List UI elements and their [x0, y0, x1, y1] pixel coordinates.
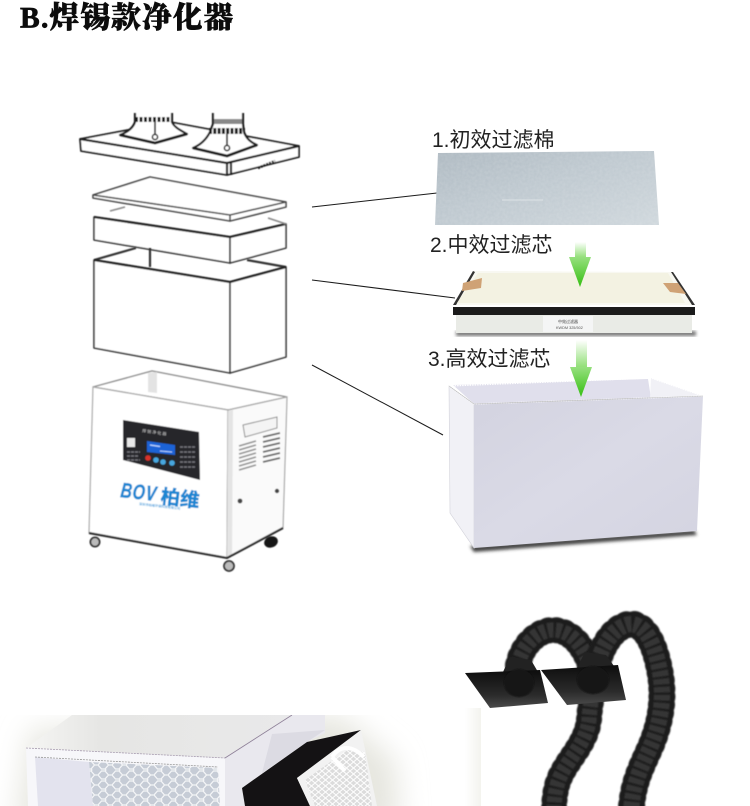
green arrow 2 [570, 340, 592, 397]
medium filter outline [94, 207, 286, 263]
brand logo: 深圳市柏维环保科技有限公司 [139, 501, 181, 511]
label: pre filter: 1.初效过滤棉 [432, 129, 555, 152]
HEPA filter box photo [449, 378, 703, 552]
side display and vents [239, 417, 280, 470]
leader lines [312, 193, 455, 435]
faint strip beside hoses [465, 708, 481, 806]
base rail [89, 528, 283, 558]
brand logo: BOV [119, 478, 159, 506]
right nozzle [541, 652, 626, 705]
machine cabinet [89, 371, 287, 571]
label: HEPA filter: 3.高效过滤芯 [428, 348, 551, 371]
front frame [26, 748, 225, 806]
pre-filter outline [93, 177, 286, 221]
black foam [242, 730, 361, 806]
screws [238, 499, 242, 503]
green arrow 1 [569, 242, 591, 287]
photo: filter cabinet close-up [15, 715, 400, 806]
opened filter with mesh [297, 730, 377, 806]
front hose [598, 624, 662, 806]
exploded line drawing of purifier [80, 113, 299, 571]
medium filter photo [453, 271, 696, 336]
control panel [123, 420, 200, 480]
label: medium filter: 2.中效过滤芯 [430, 234, 553, 257]
brand logo [119, 478, 201, 512]
title: B.焊锡款净化器 [20, 0, 234, 34]
medium filter photo: KWDM 325/502 [556, 326, 583, 330]
pre filter cotton sheet [435, 151, 659, 225]
top plate with fume hood cones [80, 113, 299, 175]
wheels [90, 534, 279, 571]
honeycomb mesh [89, 762, 220, 806]
soft background glow [15, 715, 400, 806]
top face [26, 715, 292, 758]
photo: flexible black fume hoses [465, 624, 662, 806]
medium filter photo: 中效过滤器 [558, 318, 578, 324]
control panel: 焊 锡 净 化 器 [142, 427, 167, 436]
rear hose [518, 630, 593, 806]
brand logo: 柏维 [159, 486, 201, 512]
left nozzle [465, 657, 548, 708]
HEPA filter outline [94, 248, 286, 373]
side panel [225, 715, 325, 806]
